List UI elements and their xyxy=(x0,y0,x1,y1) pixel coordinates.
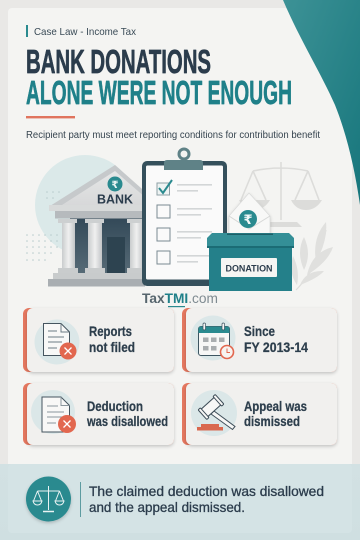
illustration: clipboard checklist xyxy=(142,149,227,286)
illustration: donation box: ₹ xyxy=(243,213,253,228)
icon: scales in teal circle xyxy=(26,476,71,522)
label: was disallowed xyxy=(86,413,168,429)
label xyxy=(89,323,135,355)
subtitle: Recipient party must meet reporting conditions for contribution benefit xyxy=(26,130,320,141)
steps xyxy=(53,273,145,279)
card: since FY 2013-14 xyxy=(182,308,337,372)
pediment xyxy=(50,165,150,206)
card: reports not filed xyxy=(23,308,174,372)
conclusion text xyxy=(89,483,324,515)
icon: gavel xyxy=(191,390,237,436)
label xyxy=(86,398,168,429)
clip xyxy=(179,149,189,159)
icon: document with cross xyxy=(31,390,76,434)
card: deduction was disallowed xyxy=(23,383,174,445)
icon: calendar with clock xyxy=(190,316,236,360)
label xyxy=(244,398,307,429)
illustration: donation box xyxy=(207,193,294,291)
bank label: BANK xyxy=(97,192,133,206)
label: not filed xyxy=(89,339,135,355)
label: dismissed xyxy=(244,413,300,429)
label: FY 2013-14 xyxy=(244,339,308,355)
label: Since xyxy=(244,323,275,339)
eyebrow: case law: Case Law - Income Tax xyxy=(34,27,137,38)
brand: TaxTMI.com: TaxTMI.com xyxy=(142,291,218,306)
label xyxy=(244,323,308,355)
rupee medallion xyxy=(108,176,122,192)
halo behind bank xyxy=(35,155,135,255)
title accent rule xyxy=(26,116,75,118)
card: appeal was dismissed xyxy=(182,383,337,445)
label: Deduction xyxy=(87,398,143,414)
icon: document with cross xyxy=(34,320,80,364)
checklist items xyxy=(157,183,170,264)
illustration: bank: ₹ xyxy=(112,180,119,191)
dark interior xyxy=(70,218,146,273)
decorative teal corner curve xyxy=(283,0,360,205)
label: Reports xyxy=(89,323,132,339)
illustration: leaves xyxy=(291,222,333,290)
envelope xyxy=(229,193,270,236)
illustration: bank xyxy=(26,155,150,286)
columns xyxy=(58,219,77,223)
title: BANK DONATIONS xyxy=(26,43,211,80)
conclusion text: The claimed deduction was disallowed xyxy=(89,483,324,499)
donation label xyxy=(221,258,277,277)
label: Appeal was xyxy=(244,398,307,414)
conclusion band xyxy=(0,464,360,540)
illustration: donation box: DONATION xyxy=(226,264,273,274)
title xyxy=(26,43,292,111)
illustration: scales watermark xyxy=(239,162,322,227)
conclusion text: and the appeal dismissed. xyxy=(89,499,245,515)
